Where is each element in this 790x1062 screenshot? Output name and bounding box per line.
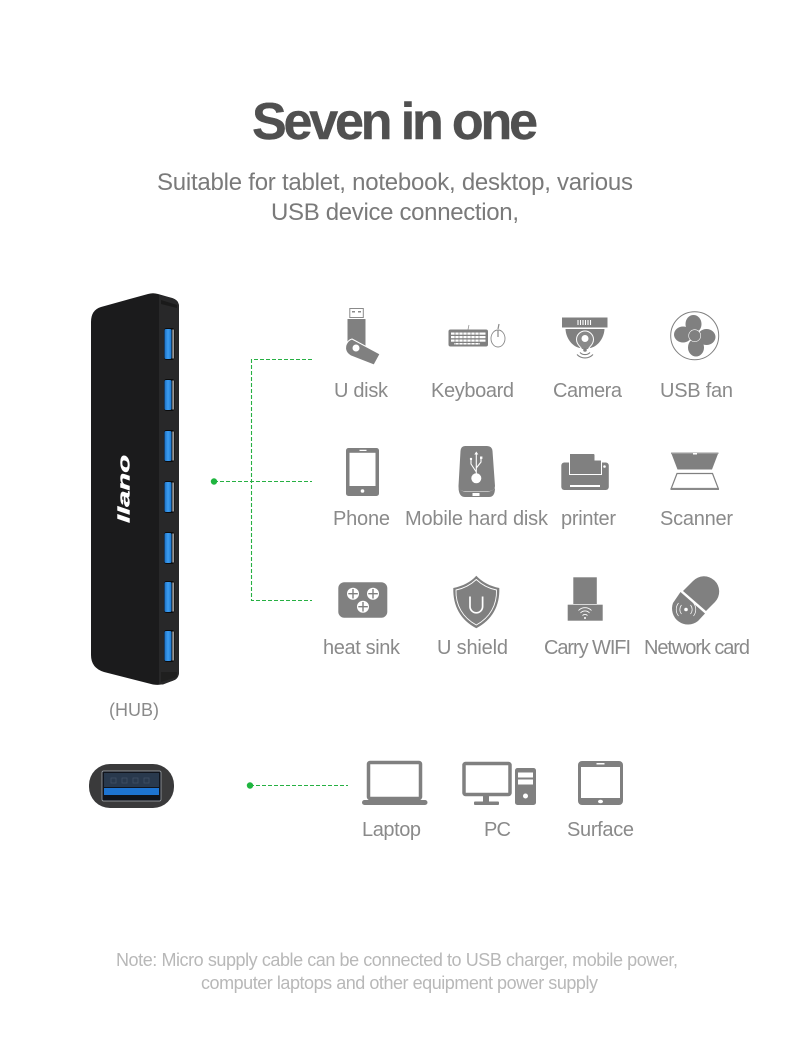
label: Camera	[553, 380, 623, 402]
label: Network card	[644, 637, 750, 659]
subtitle: Suitable for tablet, notebook, desktop, various	[157, 169, 633, 196]
device: printer	[561, 454, 616, 530]
device: Network card	[644, 576, 750, 659]
note	[116, 950, 678, 993]
USB hub product image	[91, 293, 179, 685]
hub caption: (HUB)	[109, 700, 159, 720]
device: PC	[464, 764, 536, 841]
label: Carry WIFI	[544, 637, 631, 659]
device: U disk	[334, 308, 389, 402]
label: PC	[484, 819, 511, 841]
note: Note: Micro supply cable can be connected to USB charger, mobile power,	[116, 950, 678, 970]
device: Camera	[553, 318, 623, 402]
USB ports	[164, 328, 174, 662]
device: heat sink	[323, 582, 401, 659]
label: Mobile hard disk	[405, 508, 549, 530]
green connector: hub to devices	[211, 360, 312, 600]
device: Laptop	[362, 762, 428, 841]
device: USB fan	[660, 312, 733, 402]
label: Scanner	[660, 508, 733, 530]
label: Phone	[333, 508, 390, 530]
device: Surface	[567, 761, 634, 841]
subtitle: USB device connection,	[271, 199, 519, 226]
label: USB fan	[660, 380, 733, 402]
label: Surface	[567, 819, 634, 841]
label: U shield	[437, 637, 508, 659]
hub logo: llano	[114, 455, 134, 523]
note: computer laptops and other equipment power supply	[201, 973, 598, 993]
title: Seven in one	[252, 93, 538, 151]
device: Mobile hard disk	[405, 446, 549, 530]
label: U disk	[334, 380, 389, 402]
device: Phone	[333, 448, 390, 530]
device: Carry WIFI	[544, 577, 631, 659]
device: Scanner	[660, 452, 733, 530]
device: Keyboard	[431, 324, 514, 402]
label: Keyboard	[431, 380, 514, 402]
USB port plug image	[89, 764, 174, 808]
label: Laptop	[362, 819, 421, 841]
label: printer	[561, 508, 616, 530]
green connector: plug to computers	[247, 782, 348, 789]
label: heat sink	[323, 637, 401, 659]
subtitle	[157, 169, 633, 226]
device: U shield	[437, 576, 508, 659]
